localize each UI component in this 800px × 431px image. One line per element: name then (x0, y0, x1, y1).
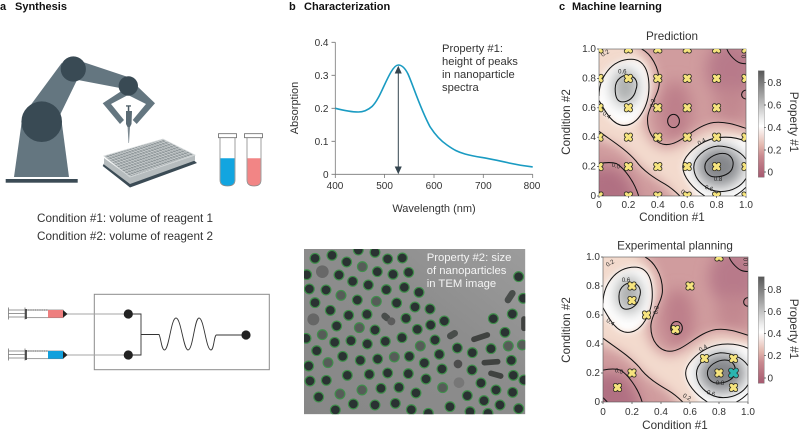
contour labels: 0.0 (611, 163, 621, 171)
chart: prediction heatmap: Condition #2 (560, 89, 573, 155)
contour labels: 0.4 (601, 111, 612, 121)
colorbar: experimental planning: 0.4 (768, 329, 782, 340)
chart: experimental planning heatmap: 0.8 (586, 281, 600, 292)
text: conditions: Condition #1: volume of reagent 1 (37, 212, 213, 225)
chart: experimental planning heatmap: 0.2 (625, 407, 639, 418)
colorbar: prediction: 0 (768, 168, 774, 178)
contour labels: 0.0 (614, 368, 624, 376)
icon: well plate (103, 139, 197, 188)
microfluidic reactor box (67, 294, 269, 370)
next experiment point (731, 370, 736, 376)
text: property 1: in nanoparticle (442, 69, 515, 81)
chart: absorption spectrum: 400 (327, 181, 344, 192)
heading: c Machine learning: Machine learning (572, 1, 662, 13)
text: property 2: in TEM image (427, 278, 496, 290)
chart: absorption spectrum: 600 (426, 181, 443, 192)
colorbar: prediction (758, 71, 800, 178)
contour labels: 0.2 (679, 189, 690, 199)
contour labels: 0.0 (742, 49, 748, 58)
chart: absorption spectrum: 500 (376, 181, 393, 192)
chart: absorption spectrum (289, 38, 541, 215)
contour labels: 0.2 (681, 393, 692, 403)
heading: a Synthesis: Synthesis (15, 1, 67, 13)
icon: blue test tube (218, 134, 236, 186)
contour labels: 0.6 (704, 185, 714, 193)
chart: experimental planning heatmap: 0 (594, 397, 600, 408)
chart: prediction heatmap: 0.4 (582, 132, 596, 143)
contour labels: 0.2 (600, 49, 611, 59)
chart: experimental planning heatmap: 1.0 (586, 252, 600, 263)
colorbar: prediction: 0.4 (768, 123, 782, 134)
chart: experimental planning heatmap: 0 (600, 407, 606, 418)
colorbar: prediction: 0.6 (768, 100, 782, 112)
chart: prediction heatmap: 1.0 (582, 44, 596, 55)
contour labels: 0.6 (618, 70, 627, 76)
text: conditions: Condition #2: volume of reagent 2 (37, 230, 213, 243)
colorbar: experimental planning: Property #1 (787, 299, 800, 359)
contour labels: 0.6 (706, 390, 716, 398)
chart: absorption spectrum: 0 (323, 170, 329, 181)
icon: robot arm (6, 56, 155, 183)
text: property 1: height of peaks (442, 56, 518, 68)
chart: experimental planning heatmap: 0.4 (586, 339, 600, 350)
heading: b Characterization: Characterization (304, 1, 390, 13)
icon: syringe blue (8, 348, 68, 360)
colorbar: prediction: Property #1 (787, 92, 800, 152)
chart: experimental planning heatmap: 0.8 (712, 407, 726, 418)
chart: prediction heatmap: 1.0 (739, 200, 753, 211)
chart: experimental planning heatmap: 0.6 (586, 310, 600, 321)
icon: pipette (126, 105, 132, 143)
chart: prediction heatmap: Prediction (646, 30, 698, 43)
colorbar: prediction: 0.8 (768, 78, 782, 89)
chart: prediction heatmap: 0.2 (582, 162, 596, 173)
colorbar: prediction: 0.2 (768, 146, 782, 156)
chart: prediction heatmap: 0.8 (582, 73, 596, 84)
chart: prediction heatmap (560, 30, 758, 224)
icon: pink test tube (244, 134, 262, 186)
sampled points (615, 255, 736, 390)
chart: absorption spectrum: 0.2 (315, 104, 329, 115)
spectrum curve (335, 65, 533, 167)
chart: absorption spectrum: Absorption (289, 82, 301, 134)
text: conditions (37, 212, 213, 243)
chart: absorption spectrum: Wavelength (nm) (392, 203, 476, 215)
chart: prediction heatmap: Condition #1 (639, 211, 705, 224)
chart: prediction heatmap: 0.6 (582, 103, 596, 114)
chart: prediction heatmap: 0 (596, 200, 602, 211)
text: property 2: Property #2: size (427, 252, 511, 264)
contour labels: 0.2 (605, 259, 616, 269)
chart: experimental planning heatmap: 0.4 (654, 407, 668, 418)
contour labels (600, 49, 748, 199)
chart: absorption spectrum: 700 (475, 181, 492, 192)
colorbar: experimental planning: 0.8 (768, 285, 782, 296)
contour labels: 0.4 (605, 318, 616, 328)
text: property 1: Property #1: (442, 43, 503, 55)
arrow: peak height (396, 67, 401, 173)
chart: prediction heatmap: 0.8 (710, 200, 724, 211)
chart: prediction heatmap: 0.4 (651, 200, 665, 211)
chart: experimental planning heatmap: Experimental planning (617, 240, 733, 252)
chart: experimental planning heatmap (560, 240, 760, 431)
heading: a Synthesis: a (0, 1, 6, 13)
contour labels: 0.0 (744, 257, 750, 266)
chart: experimental planning heatmap: 0.6 (683, 407, 697, 418)
colorbar: experimental planning: 0 (768, 374, 774, 384)
colorbar: experimental planning: 0.2 (768, 351, 782, 362)
contour labels: 0.6 (622, 278, 631, 284)
chart: absorption spectrum: 0.1 (315, 137, 329, 148)
heading: b Characterization: b (289, 1, 296, 13)
contour labels: 0.8 (716, 381, 725, 387)
chart: prediction heatmap: 0 (590, 191, 596, 202)
contour labels: 0.2 (653, 305, 661, 315)
colorbar: experimental planning: 0.6 (768, 307, 782, 318)
heading: c Machine learning: c (559, 1, 565, 13)
contour labels: 0.8 (714, 177, 723, 183)
contour labels: 0.4 (698, 344, 709, 354)
chart: experimental planning heatmap: 0.2 (586, 368, 600, 379)
chart: absorption spectrum: 0.4 (315, 38, 329, 49)
colorbar: experimental planning (758, 277, 800, 384)
chart: prediction heatmap: 0.6 (680, 200, 695, 211)
contour labels (605, 257, 750, 403)
contour labels: 0.4 (697, 137, 708, 147)
sampled points (597, 47, 748, 198)
chart: experimental planning heatmap: 1.0 (741, 407, 755, 418)
chart: absorption spectrum: 0.3 (315, 71, 329, 82)
chart: experimental planning heatmap: Condition #2 (560, 297, 573, 363)
text: property 2: of nanoparticles (427, 265, 507, 277)
chart: prediction heatmap: 0.2 (621, 200, 636, 211)
TEM image (304, 249, 525, 414)
contour labels: 0.2 (650, 98, 657, 108)
chart: absorption spectrum: 800 (524, 181, 541, 192)
text: property 1: spectra (442, 82, 479, 94)
icon: syringe pink (8, 308, 68, 320)
